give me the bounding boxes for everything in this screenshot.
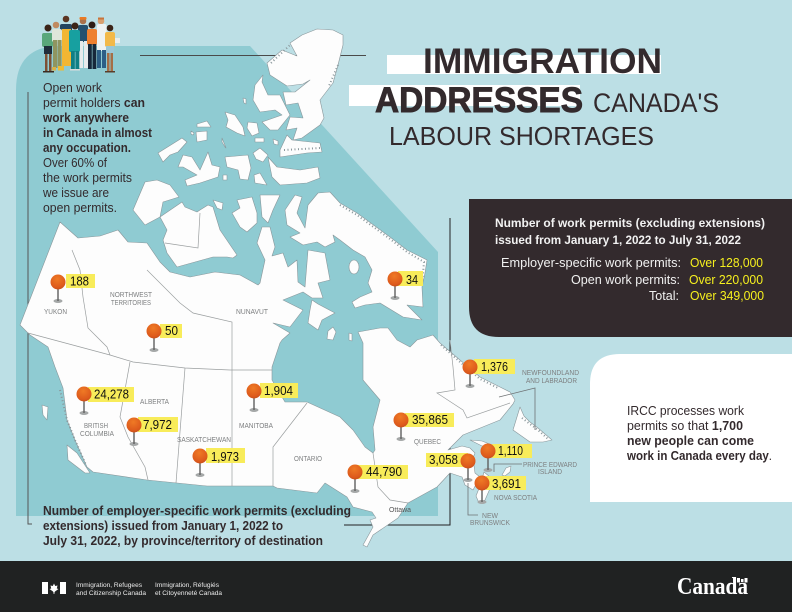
text: open work permits: in Canada in almost — [43, 126, 153, 140]
worker: yellow shirt — [105, 25, 120, 72]
pin: Prince Edward Island 1,110 — [480, 443, 532, 472]
Ellesmere Island — [267, 29, 343, 140]
permit rows: Open work permits: — [571, 273, 680, 287]
text: open work permits: any occupation. — [43, 141, 131, 155]
province labels: NOVA SCOTIA — [494, 495, 537, 502]
province labels: PRINCE EDWARD — [523, 462, 577, 469]
callout text: new people can come — [627, 434, 754, 448]
provincial borders — [28, 213, 510, 503]
province labels: NORTHWEST — [110, 292, 153, 299]
title: ADDRESSES — [375, 81, 583, 120]
worker: orange cap — [78, 17, 88, 68]
province labels — [44, 292, 579, 527]
Axel Heiberg Island — [253, 75, 290, 130]
text: map caption: July 31, 2022, by province/territory of destination — [43, 533, 323, 548]
permit rows: Over 220,000 — [689, 273, 763, 287]
pin: Quebec 35,865: 35,865 — [412, 412, 448, 427]
worker: doctor — [97, 18, 106, 68]
pin: Prince Edward Island 1,110: 1,110 — [498, 443, 523, 458]
pin: Ontario 44,790 — [348, 464, 408, 493]
top connector line — [140, 55, 366, 56]
text: map caption: Number of employer-specific work permits (excluding — [43, 503, 351, 518]
pin: British Columbia 24,278 — [76, 386, 134, 415]
Newfoundland — [513, 407, 552, 442]
text: open work permits: permit holders can — [43, 96, 145, 110]
text: map caption — [43, 503, 351, 548]
province labels: BRUNSWICK — [470, 520, 510, 527]
worker: orange vest — [87, 22, 97, 69]
department name: and Citizenship Canada — [76, 590, 146, 597]
worker: olive uniform — [52, 22, 64, 70]
permit rows — [501, 256, 764, 303]
province labels: Ottawa — [389, 507, 411, 514]
pin: Newfoundland and Labrador 1,376 — [462, 359, 515, 388]
panel: total work permits — [469, 199, 792, 337]
Banks Island — [133, 180, 179, 225]
callout text — [626, 404, 772, 463]
province labels: NUNAVUT — [236, 309, 269, 316]
text: open work permits: Open work — [43, 81, 103, 95]
Canada wordmark: Canada — [677, 574, 748, 600]
department name: Immigration, Refugees — [76, 582, 143, 589]
text: open work permits — [42, 81, 153, 215]
text: open work permits: Over 60% of — [43, 156, 107, 170]
pin: Newfoundland and Labrador 1,376: 1,376 — [481, 359, 508, 374]
pin: Quebec 35,865 — [394, 412, 454, 441]
pin: Nova Scotia 3,691: 3,691 — [492, 476, 521, 491]
title: CANADA'S — [593, 88, 719, 118]
title: IMMIGRATION — [423, 42, 662, 81]
panel heading — [495, 216, 765, 247]
department name: et Citoyenneté Canada — [155, 590, 222, 597]
province labels: NEWFOUNDLAND — [522, 370, 579, 377]
pin: Alberta 7,972: 7,972 — [143, 417, 172, 432]
province leader lines — [468, 388, 535, 515]
text: open work permits: work anywhere — [42, 111, 129, 125]
Devon Island — [280, 135, 322, 157]
province labels: ONTARIO — [294, 456, 322, 463]
title: LABOUR SHORTAGES — [389, 121, 654, 151]
text: open work permits: open permits. — [43, 201, 117, 215]
Prince Charles Island — [349, 260, 359, 274]
province labels: AND LABRADOR — [526, 378, 577, 385]
department name: Immigration, Réfugiés — [155, 582, 220, 589]
pin: New Brunswick 3,058: 3,058 — [429, 452, 458, 467]
worker: teal scrubs — [69, 22, 80, 70]
panel: processing callout — [590, 354, 792, 502]
Nova Scotia — [476, 472, 492, 503]
left bracket line — [28, 92, 32, 524]
Prince of Wales Island — [232, 197, 257, 232]
province labels: SASKATCHEWAN — [177, 437, 231, 444]
right bracket line — [344, 218, 450, 525]
jagged coast texture — [60, 45, 548, 465]
permit rows: Over 128,000 — [690, 256, 763, 270]
text: open work permits: we issue are — [42, 186, 109, 200]
Prince Edward Island — [502, 466, 511, 476]
icon: group of workers — [42, 16, 120, 72]
text: map caption: extensions) issued from January 1, 2022 to — [43, 518, 283, 533]
pin: Nunavut 34: 34 — [406, 272, 418, 287]
Queen Elizabeth islands — [253, 148, 268, 162]
Somerset Island — [260, 195, 280, 223]
map of Canada — [20, 29, 552, 547]
Haida Gwaii — [42, 405, 48, 420]
pin: Yukon 188 — [50, 274, 95, 303]
teal map panel — [16, 46, 438, 516]
pin: Northwest Territories 50: 50 — [165, 323, 178, 338]
pin: Manitoba 1,904: 1,904 — [264, 383, 293, 398]
callout text: IRCC processes work — [627, 404, 745, 418]
province labels: NEW — [482, 513, 498, 520]
Victoria Island — [160, 202, 237, 267]
pin: Ontario 44,790: 44,790 — [366, 464, 402, 479]
province labels: ISLAND — [538, 469, 562, 476]
pin: Manitoba 1,904 — [246, 383, 298, 412]
province labels: MANITOBA — [239, 423, 273, 430]
footer — [0, 561, 792, 612]
Cornwallis area — [268, 157, 320, 185]
panel heading: issued from January 1, 2022 to July 31, 2022 — [495, 233, 741, 247]
title — [349, 42, 719, 151]
panel heading: Number of work permits (excluding extensions) — [495, 216, 765, 230]
province labels: TERRITORIES — [111, 300, 151, 307]
mainland — [20, 222, 515, 547]
pin: Northwest Territories 50 — [146, 323, 182, 352]
province labels: QUEBEC — [414, 439, 441, 446]
icon: Canadian flag — [42, 582, 66, 594]
pin: Alberta 7,972 — [126, 417, 178, 446]
Southampton Island — [308, 300, 335, 330]
permit rows: Employer-specific work permits: — [501, 256, 681, 270]
Vancouver Island — [67, 445, 90, 473]
pin: Yukon 188: 188 — [70, 274, 89, 288]
province labels: BRITISH — [84, 423, 108, 430]
Baffin Island — [285, 192, 427, 320]
pin: Nova Scotia 3,691 — [474, 476, 526, 504]
text: open work permits: the work permits — [43, 171, 132, 185]
permit rows: Total: — [649, 289, 679, 303]
callout text: permits so that 1,700 — [627, 419, 743, 433]
callout text: work in Canada every day. — [626, 449, 772, 463]
worker: yellow overalls — [60, 16, 72, 66]
province labels: YUKON — [44, 309, 67, 316]
department name — [76, 582, 222, 597]
pin: British Columbia 24,278: 24,278 — [94, 386, 129, 402]
worker: green shirt — [42, 24, 54, 72]
pin: Nunavut 34 — [388, 271, 423, 300]
pin: Saskatchewan 1,973: 1,973 — [211, 449, 239, 464]
pin: Saskatchewan 1,973 — [192, 448, 245, 477]
province labels: ALBERTA — [140, 399, 169, 406]
permit rows: Over 349,000 — [690, 289, 764, 303]
province labels: COLUMBIA — [80, 431, 114, 438]
Hudson Bay islands — [327, 327, 336, 340]
pin: New Brunswick 3,058 — [426, 452, 476, 482]
Anticosti Island — [470, 440, 492, 446]
